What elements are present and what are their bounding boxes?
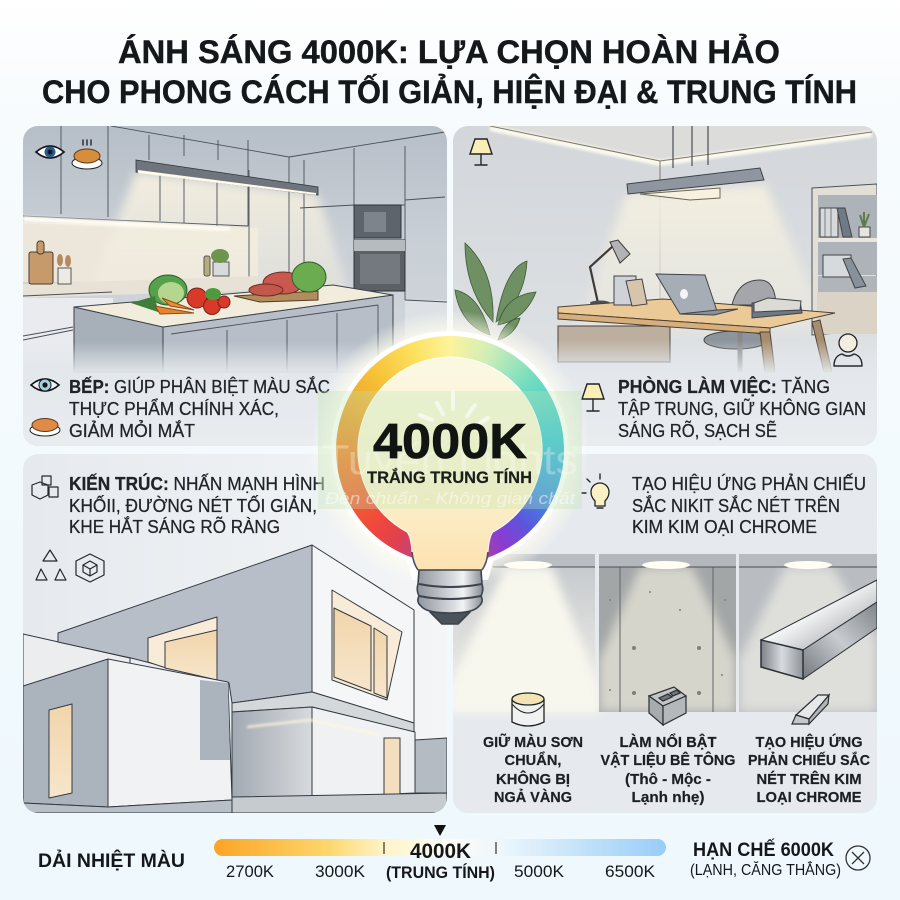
caption column: concrete: LÀM NỔI BẬT [620,733,716,751]
caption column: paint: KHÔNG BỊ [496,770,570,788]
watermark: Đèn chuẩn - Không gian chất [325,489,576,508]
caption column: paint [483,733,583,806]
caption column: concrete: (Thô - Mộc - [625,771,711,788]
caption: office [618,376,866,441]
scale label: DẢI NHIỆT MÀU [38,850,185,872]
icon: paint bucket [512,693,544,726]
icon: triangles [36,550,66,580]
desk lamp [590,240,630,306]
tick marks [384,842,496,854]
caption column: chrome: PHẢN CHIẾU SẮC [748,751,870,769]
icon: eye (caption) [31,379,59,391]
panel: architecture [23,454,447,813]
caption: materials [632,473,866,537]
fade behind caption [558,342,833,372]
caption column: paint: NGẢ VÀNG [494,789,572,806]
kitchen light cone [114,170,348,294]
caption column: chrome [748,733,870,806]
cove lighting [247,720,380,735]
caption column: paint: GIỮ MÀU SƠN [483,733,583,751]
kitchen counter [23,276,258,372]
panel: kitchen [23,126,447,446]
books on desk [614,276,802,318]
caption: architecture: KIẾN TRÚC: NHẤN MẠNH HÌNH [69,473,325,494]
building [23,545,447,813]
bulb halo [310,310,590,590]
caption column: concrete: Lạnh nhẹ) [632,789,704,806]
vegetables and meat [131,262,326,314]
laptop [656,274,738,315]
bulb label: neutral white: TRẮNG TRUNG TÍNH [367,468,532,487]
caption column: chrome: TẠO HIỆU ỨNG [756,733,862,751]
title [42,34,857,110]
neutral label: (TRUNG TÍNH) [386,863,495,882]
caption column: chrome: NÉT TRÊN KIM [756,770,862,788]
kitchen island [74,285,393,372]
caption: kitchen: GIẢM MỎI MẮT [69,420,195,441]
icon: food dish (caption) [30,418,60,436]
watermark: Tuyến Lights [322,436,578,483]
limit note: HẠN CHẾ 6000K [693,839,834,861]
caption: materials: SẮC NIKIT SẮC NÉT TRÊN [632,495,840,516]
caption: materials: TẠO HIỆU ỨNG PHẢN CHIẾU [632,473,866,494]
icon: metal ingot [792,695,829,724]
watermark [318,391,582,509]
office ceiling [504,126,872,146]
caption: kitchen: BẾP: GIÚP PHÂN BIỆT MÀU SẮC [69,376,330,397]
caption: architecture [69,473,325,537]
caption: kitchen [69,376,330,441]
gradient bar [214,839,666,856]
desk [558,280,835,372]
icon: lamp (top) [470,139,492,165]
icon: person [834,334,862,366]
panel: materials [448,454,877,813]
icon: cross circle [846,846,870,870]
scale ticks text: 6500K [605,862,656,881]
bulb glass body [358,357,542,570]
scale ticks text: 5000K [514,862,565,881]
icon: concrete block [649,687,686,725]
icon: lightbulb idea [582,474,609,508]
fade behind caption [23,344,378,374]
kitchen pendant lamp [136,160,318,195]
panel: office [453,126,877,446]
caption: office: PHÒNG LÀM VIỆC: TĂNG [618,376,830,397]
cutting board and utensils [29,241,229,284]
caption: office: TẬP TRUNG, GIỮ KHÔNG GIAN [618,398,866,419]
caption: architecture: KHE HẮT SÁNG RÕ RÀNG [69,516,280,537]
bulb neck outline [412,552,488,570]
marker triangle [434,825,446,836]
kitchen backsplash [23,222,258,282]
title: CHO PHONG CÁCH TỐI GIẢN, HIỆN ĐẠI & TRUNG TÍNH [42,74,857,110]
icon: eye (top) [36,146,64,158]
caption column: concrete [600,733,736,806]
caption: office: SÁNG RÕ, SẠCH SẼ [618,420,777,441]
caption: materials: KIM KIM OẠI CHROME [632,517,817,537]
bulb colour ring [336,336,564,564]
office light cone [588,183,812,326]
limit note [690,839,841,879]
icon: wireframe box [76,554,104,582]
shadow on wall [200,680,230,760]
plant [455,243,536,340]
pendant lamp [627,126,764,200]
colour temperature scale [38,825,870,882]
bulb label: 4000K: 4000K [373,415,527,469]
kitchen cabinet lines [23,126,447,302]
bulb screw base [417,570,483,624]
icon: lamp (caption) [582,384,604,411]
icon: cubes [32,476,58,499]
tile: chrome bar [739,554,877,712]
caption column: chrome: LOẠI CHROME [756,789,862,806]
tile: concrete wall [599,554,736,712]
caption column: paint: CHUẨN, [504,751,562,769]
caption column: concrete: VẬT LIỆU BÊ TÔNG [600,751,736,769]
limit note: (LẠNH, CĂNG THẲNG) [690,860,841,879]
tile: painted wall [448,554,600,712]
title: ÁNH SÁNG 4000K: LỰA CHỌN HOÀN HẢO [118,34,780,70]
scale ticks text [226,862,656,881]
bookshelf [812,184,877,335]
caption: architecture: KHỐII, ĐƯỜNG NÉT TỐI GIẢN, [69,495,317,516]
kitchen built-in microwave and oven [354,205,405,291]
icon: food dish (top) [72,140,102,169]
4000K label: 4000K [410,840,471,863]
kitchen under-cabinet light strip [23,216,230,231]
caption: kitchen: THỰC PHẨM CHÍNH XÁC, [69,398,279,419]
scale ticks text: 3000K [315,862,366,881]
scale ticks text: 2700K [226,862,275,881]
